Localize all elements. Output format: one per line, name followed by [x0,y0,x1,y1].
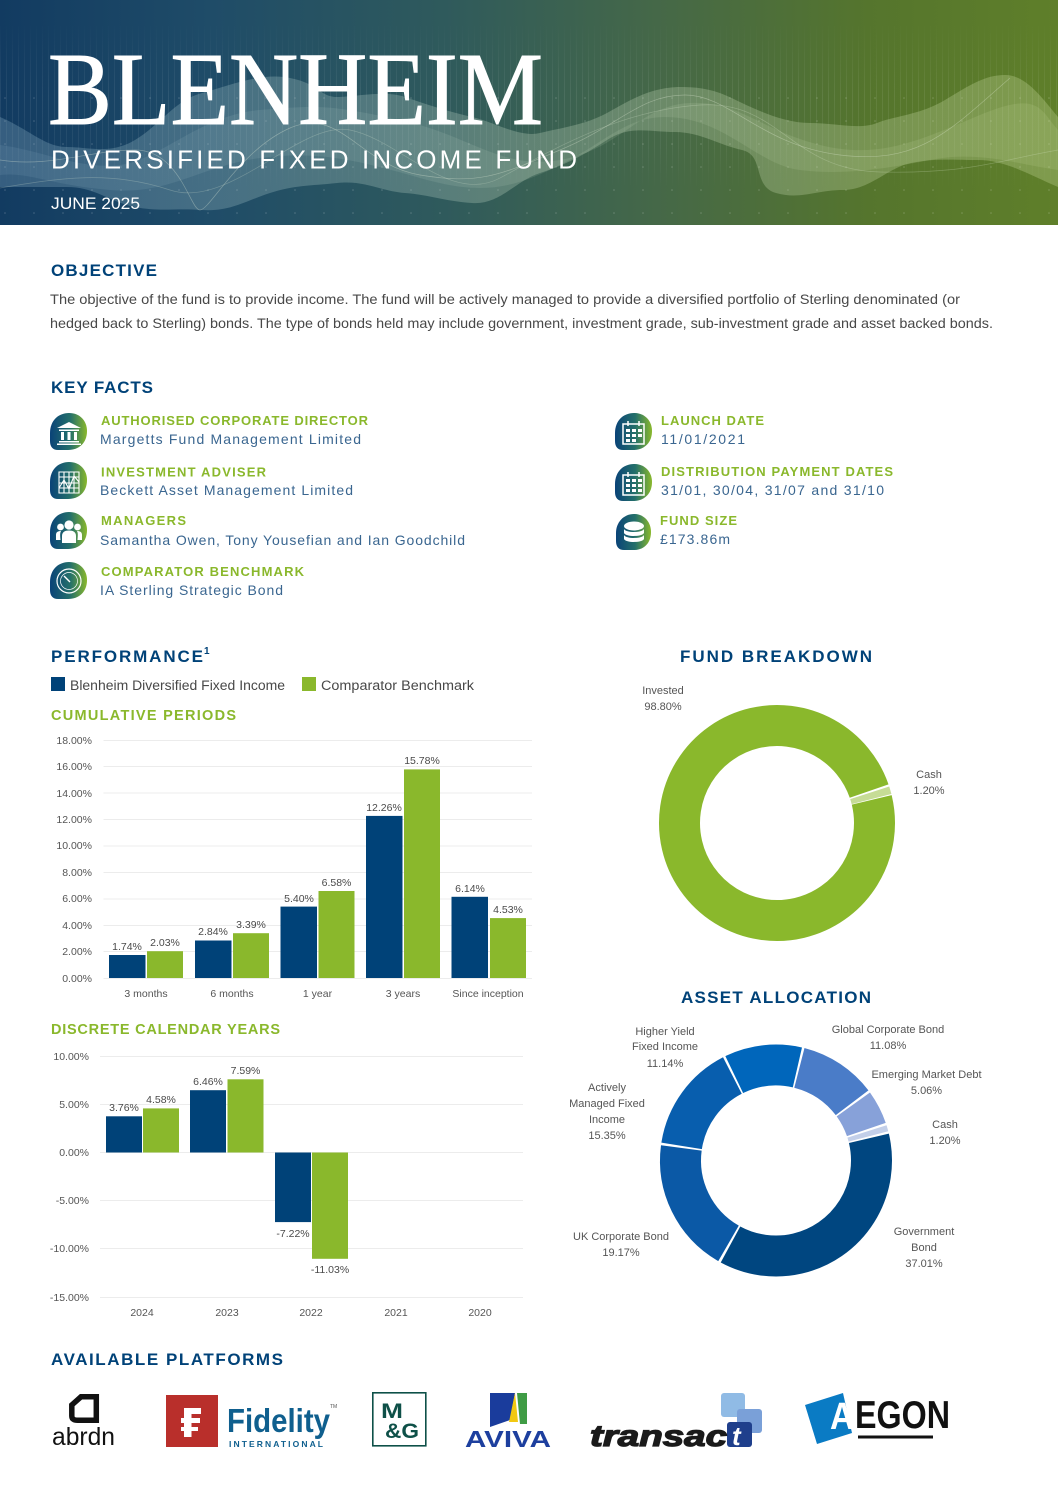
logo: abrdn [52,1397,115,1451]
fact: distribution payment dates: 31/01, 30/04, 31/07 and 31/10 [661,482,884,498]
bar chart: discrete calendar years: 10.00% [53,1051,89,1063]
donut chart: asset allocation: 11.08% [870,1040,906,1052]
bar chart: discrete calendar years: 2023 [215,1307,239,1319]
donut chart: asset allocation: Bond [911,1242,937,1254]
donut chart: asset allocation: Higher Yield [635,1026,695,1038]
fact: comparator benchmark: IA Sterling Strategic Bond [100,582,283,598]
fact: fund size: £173.86m [660,531,730,547]
bar chart: discrete calendar years: -10.00% [50,1243,89,1255]
bar chart: discrete calendar years: 2024 [130,1307,154,1319]
icon: coin stack [616,514,651,550]
donut chart: asset allocation: 15.35% [588,1130,626,1142]
bar chart: cumulative periods: 2.84% [198,926,228,938]
donut chart: asset allocation: UK Corporate Bond [573,1231,669,1243]
title: BLENHEIM [48,32,543,147]
donut chart: fund breakdown: 98.80% [644,701,682,713]
bar chart: cumulative periods: Since inception [452,988,524,1000]
bar chart: discrete calendar years [50,1051,523,1319]
legend [51,677,474,693]
fact: managers [100,513,465,548]
donut chart: fund breakdown: Cash [916,769,942,781]
fact: launch date: 11/01/2021 [661,431,745,447]
bar chart: discrete calendar years: 7.59% [231,1065,260,1077]
bar chart: cumulative periods: 5.40% [284,893,314,905]
icon: calendar check [615,413,652,450]
donut chart: fund breakdown [642,685,945,945]
fact: distribution payment dates [661,464,893,498]
bar chart: cumulative periods: 8.00% [62,867,92,879]
bar chart: cumulative periods: 4.53% [493,904,523,916]
fact: managers: MANAGERS [101,513,186,528]
logo: Aegon: EGON [855,1394,950,1437]
objective text [50,291,993,331]
donut chart: asset allocation [569,1024,982,1294]
logo: abrdn: abrdn [52,1423,115,1451]
available platforms heading: AVAILABLE PLATFORMS [51,1350,283,1369]
bar chart: cumulative periods: 0.00% [62,973,92,985]
logo: Aegon: A [830,1396,854,1438]
key facts heading: KEY FACTS [51,378,153,397]
fact: managers: Samantha Owen, Tony Yousefian and Ian Goodchild [100,532,465,548]
donut chart: fund breakdown: 1.20% [913,785,945,797]
fact: distribution payment dates: DISTRIBUTION PAYMENT DATES [661,464,893,479]
date: JUNE 2025 [51,194,140,213]
legend: Comparator Benchmark [321,678,474,693]
bar chart: discrete calendar years: 2021 [384,1307,408,1319]
objective text: The objective of the fund is to provide income. The fund will be actively managed to provide a diversified portfolio of Sterling denominated (or [50,291,960,307]
fact: fund size [660,513,737,547]
logo: transact: transac [590,1420,727,1453]
fact: authorised corporate director [100,413,369,447]
logo: M&G: &G [385,1420,419,1443]
bar chart: discrete calendar years: -5.00% [56,1195,89,1207]
bar chart: cumulative periods: 3.39% [236,919,266,931]
bar chart: cumulative periods: 10.00% [56,840,92,852]
donut chart: asset allocation: 11.14% [647,1058,683,1070]
donut chart: asset allocation: 37.01% [905,1258,943,1270]
donut chart: asset allocation: Income [589,1114,625,1126]
legend: Blenheim Diversified Fixed Income [70,678,285,693]
logo: Aviva [465,1393,551,1452]
fact: comparator benchmark: COMPARATOR BENCHMARK [101,564,305,579]
donut chart: asset allocation: Cash [932,1119,958,1131]
donut chart: fund breakdown: Invested [642,685,684,697]
donut chart: asset allocation: 1.20% [929,1135,961,1147]
donut chart: asset allocation: Global Corporate Bond [832,1024,944,1036]
asset allocation heading: ASSET ALLOCATION [681,988,871,1007]
bar chart: discrete calendar years: 2022 [299,1307,323,1319]
discrete calendar years heading: DISCRETE CALENDAR YEARS [51,1022,280,1038]
bar chart: cumulative periods: 12.00% [56,814,92,826]
donut chart: asset allocation: 19.17% [602,1247,640,1259]
fact: investment adviser: INVESTMENT ADVISER [101,464,267,480]
bar chart: cumulative periods: 3 years [386,988,420,1000]
header banner [0,0,1058,225]
fact: investment adviser: Beckett Asset Management Limited [100,482,353,498]
fact: investment adviser [100,464,353,498]
bar chart: cumulative periods: 4.00% [62,920,92,932]
icon: bank [50,413,87,450]
donut chart: asset allocation: Managed Fixed [569,1098,645,1110]
donut chart: asset allocation: 5.06% [911,1085,942,1097]
bar chart: cumulative periods: 6.00% [62,893,92,905]
bar chart: cumulative periods: 3 months [124,988,168,1000]
logo: M&G [373,1393,426,1446]
bar chart: discrete calendar years: 3.76% [109,1102,139,1114]
bar chart: cumulative periods: 6 months [210,988,254,1000]
bar chart: cumulative periods: 2.00% [62,946,92,958]
icon: chart grid [50,462,87,499]
subtitle: DIVERSIFIED FIXED INCOME FUND [51,144,577,174]
bar chart: cumulative periods [56,735,532,1000]
bar chart: cumulative periods: 6.58% [322,877,351,889]
logo: Fidelity: TM [330,1404,337,1410]
bar chart: cumulative periods: 1.74% [112,941,142,953]
fact: authorised corporate director: AUTHORISED CORPORATE DIRECTOR [101,413,369,428]
performance heading: PERFORMANCE [51,647,203,666]
donut chart: asset allocation: Emerging Market Debt [871,1069,982,1081]
cumulative periods heading: CUMULATIVE PERIODS [51,708,236,724]
donut chart: asset allocation: Fixed Income [632,1041,698,1053]
logo: transact: t [732,1421,742,1451]
objective heading: OBJECTIVE [51,261,157,280]
fact: authorised corporate director: Margetts Fund Management Limited [100,431,361,447]
fact: launch date: LAUNCH DATE [661,413,764,428]
bar chart: discrete calendar years: 2020 [468,1307,492,1319]
bar chart: discrete calendar years: 6.46% [193,1076,223,1088]
bar chart: discrete calendar years: 0.00% [59,1147,89,1159]
objective text: hedged back to Sterling) bonds. The type of bonds held may include government, investment grade, sub-investment grade and asset backed bonds. [50,315,993,331]
bar chart: cumulative periods: 15.78% [404,755,440,767]
fund breakdown heading: FUND BREAKDOWN [680,647,872,666]
logo: M&G: M [381,1400,403,1423]
performance heading: 1 [204,646,210,657]
logo: Fidelity: INTERNATIONAL [229,1439,323,1449]
bar chart: cumulative periods: 2.03% [150,937,180,949]
icon: gauge [50,562,87,599]
bar chart: cumulative periods: 14.00% [56,788,92,800]
fact: comparator benchmark [100,564,305,598]
fact: launch date [661,413,764,447]
bar chart: discrete calendar years: -7.22% [276,1228,310,1240]
logo: Fidelity: Fidelity [227,1402,331,1439]
fact: fund size: FUND SIZE [660,513,737,528]
bar chart: cumulative periods: 1 year [303,988,333,1000]
bar chart: discrete calendar years: 5.00% [59,1099,89,1111]
bar chart: cumulative periods: 6.14% [455,883,485,895]
logo: Aegon [805,1393,950,1444]
bar chart: cumulative periods: 18.00% [56,735,92,747]
bar chart: discrete calendar years: 4.58% [146,1094,176,1106]
bar chart: cumulative periods: 16.00% [56,761,92,773]
bar chart: cumulative periods: 12.26% [366,802,402,814]
icon: people [50,512,87,549]
logo: Fidelity [166,1395,337,1449]
donut chart: asset allocation: Actively [588,1082,626,1094]
bar chart: discrete calendar years: -15.00% [50,1292,89,1304]
donut chart: asset allocation: Government [894,1226,954,1238]
logo: Aviva: AVIVA [465,1426,551,1452]
logo: transact [590,1393,762,1453]
icon: calendar [615,464,652,501]
bar chart: discrete calendar years: -11.03% [311,1264,349,1276]
